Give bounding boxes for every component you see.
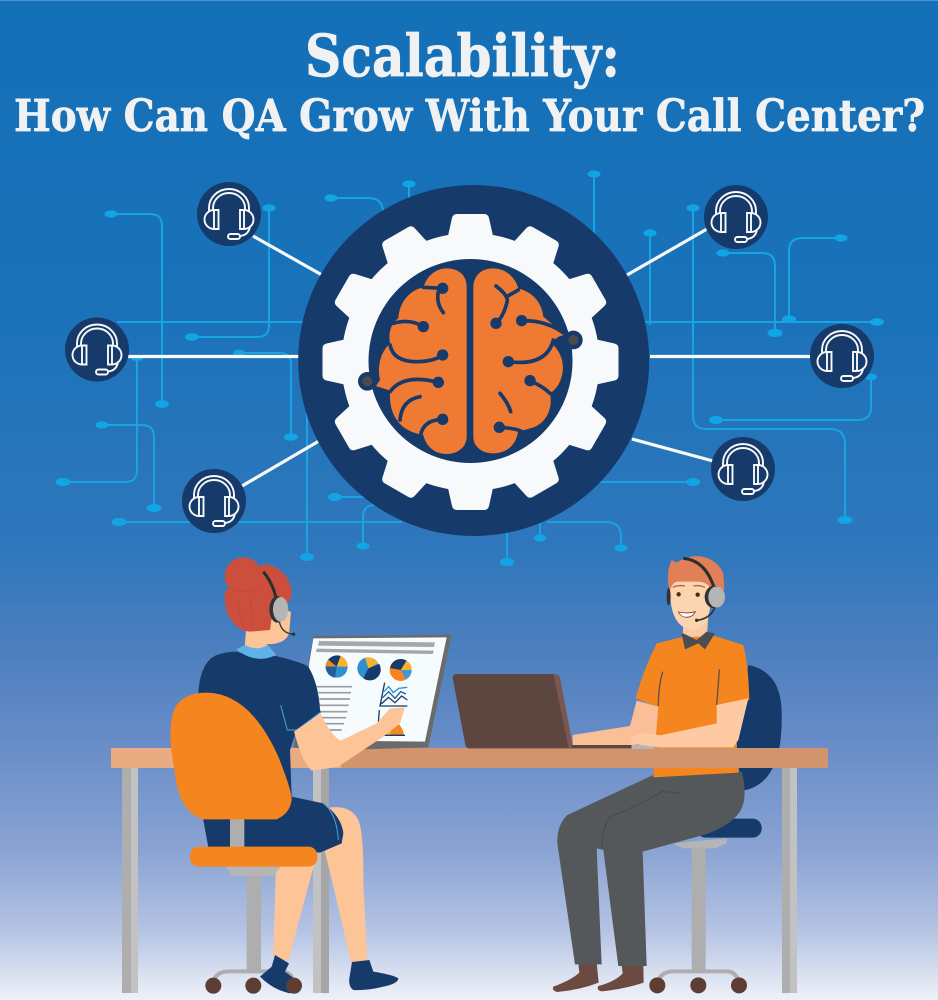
title xyxy=(14,22,925,142)
woman's hair xyxy=(225,557,292,632)
connector lines xyxy=(127,229,812,486)
woman's chair stand xyxy=(213,875,294,984)
title: Scalability: xyxy=(305,22,620,90)
man's trousers xyxy=(557,772,745,966)
monitor xyxy=(293,635,452,749)
woman's legs xyxy=(260,807,398,993)
gear xyxy=(322,214,618,510)
man xyxy=(553,556,749,992)
woman's neck and face xyxy=(245,608,291,655)
icon: headset left xyxy=(65,318,129,382)
woman's headset xyxy=(263,572,295,636)
man's neck xyxy=(683,617,708,639)
bar chart xyxy=(377,710,405,735)
man's headset xyxy=(683,558,725,622)
gear with brain xyxy=(298,185,649,536)
man's collar xyxy=(682,632,715,649)
text lines xyxy=(317,687,352,730)
woman's chair xyxy=(170,693,317,994)
woman's collar xyxy=(236,645,276,659)
man's near arm xyxy=(630,698,748,747)
icon: headset top-right xyxy=(704,185,768,249)
circuit nodes xyxy=(56,170,884,566)
man's chair xyxy=(649,665,782,993)
brain xyxy=(358,268,583,454)
table top xyxy=(111,748,828,768)
woman's arm xyxy=(294,707,405,771)
man's head xyxy=(669,578,713,630)
line chart xyxy=(380,683,407,706)
pie charts xyxy=(326,655,412,681)
icon: headset bottom-left xyxy=(182,469,246,533)
icon: headset top-left xyxy=(197,182,261,246)
woman xyxy=(170,557,405,994)
laptop xyxy=(453,674,748,749)
table legs xyxy=(122,768,797,993)
man's shoes xyxy=(553,963,644,992)
circuit network xyxy=(63,174,877,562)
woman's dress xyxy=(198,652,343,853)
man's shirt xyxy=(636,636,749,777)
icon: headset right xyxy=(810,324,874,388)
icon: headset bottom-right xyxy=(711,437,775,501)
man's far arm xyxy=(573,701,658,747)
